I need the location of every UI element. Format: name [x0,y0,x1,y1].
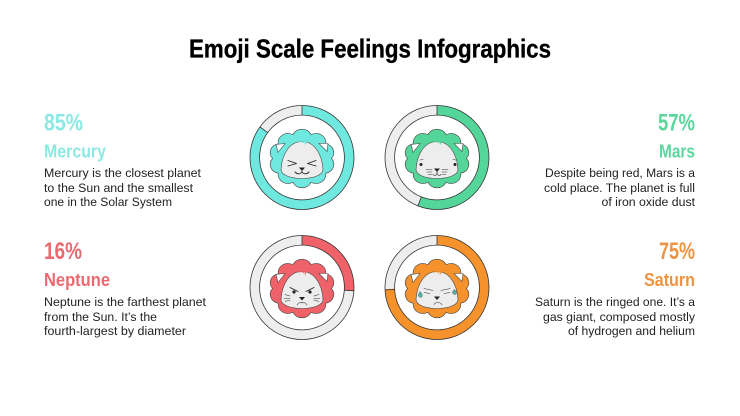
Neptune description: from the Sun. It’s the [44,310,157,324]
Mars description: Despite being red, Mars is a [545,166,695,180]
Neptune description: fourth-largest by diameter [44,324,186,338]
Mercury description: Mercury is the closest planet [44,166,202,180]
Mercury description [44,166,202,209]
Neptune percentage: 16% [44,238,82,265]
icon: crying lion [405,259,469,318]
progress arc 85% [255,110,349,205]
Mars percentage: 57% [658,110,695,136]
icon: angry lion [270,259,334,318]
Mercury description: to the Sun and the smallest [44,181,194,195]
Mars description: cold place. The planet is full [544,181,695,195]
Saturn description: Saturn is the ringed one. It’s a [535,295,695,309]
donut chart: Saturn 75% [385,236,489,340]
Mars heading: Mars [659,142,695,162]
panel: Saturn text [535,238,696,338]
Mars description: of iron oxide dust [602,195,696,209]
Neptune description: Neptune is the farthest planet [44,295,207,309]
Saturn description: of hydrogen and helium [568,324,695,338]
Mars description [544,166,696,209]
Neptune description [44,295,207,338]
Saturn heading: Saturn [644,270,695,290]
title: Emoji Scale Feelings Infographics [189,34,551,64]
icon: squinting happy lion [270,129,334,188]
donut chart: Mercury 85% [250,106,354,210]
donut chart: Mars 57% [385,106,489,210]
Mercury heading: Mercury [44,142,106,162]
Neptune heading: Neptune [44,270,110,290]
Saturn description [535,295,696,338]
icon: calm lion [405,129,469,188]
panel: Mars text [544,110,696,209]
progress arc 75% [390,240,484,335]
Mercury description: one in the Solar System [44,195,172,209]
donut chart: Neptune 16% [250,236,354,340]
progress arc 57% [390,110,484,205]
Mercury percentage: 85% [44,110,83,136]
panel: Mercury text [44,110,202,209]
tears [418,290,456,297]
Saturn description: gas giant, composed mostly [543,310,696,324]
Saturn percentage: 75% [659,238,695,265]
panel: Neptune text [44,238,207,338]
progress arc 16% [255,240,349,335]
